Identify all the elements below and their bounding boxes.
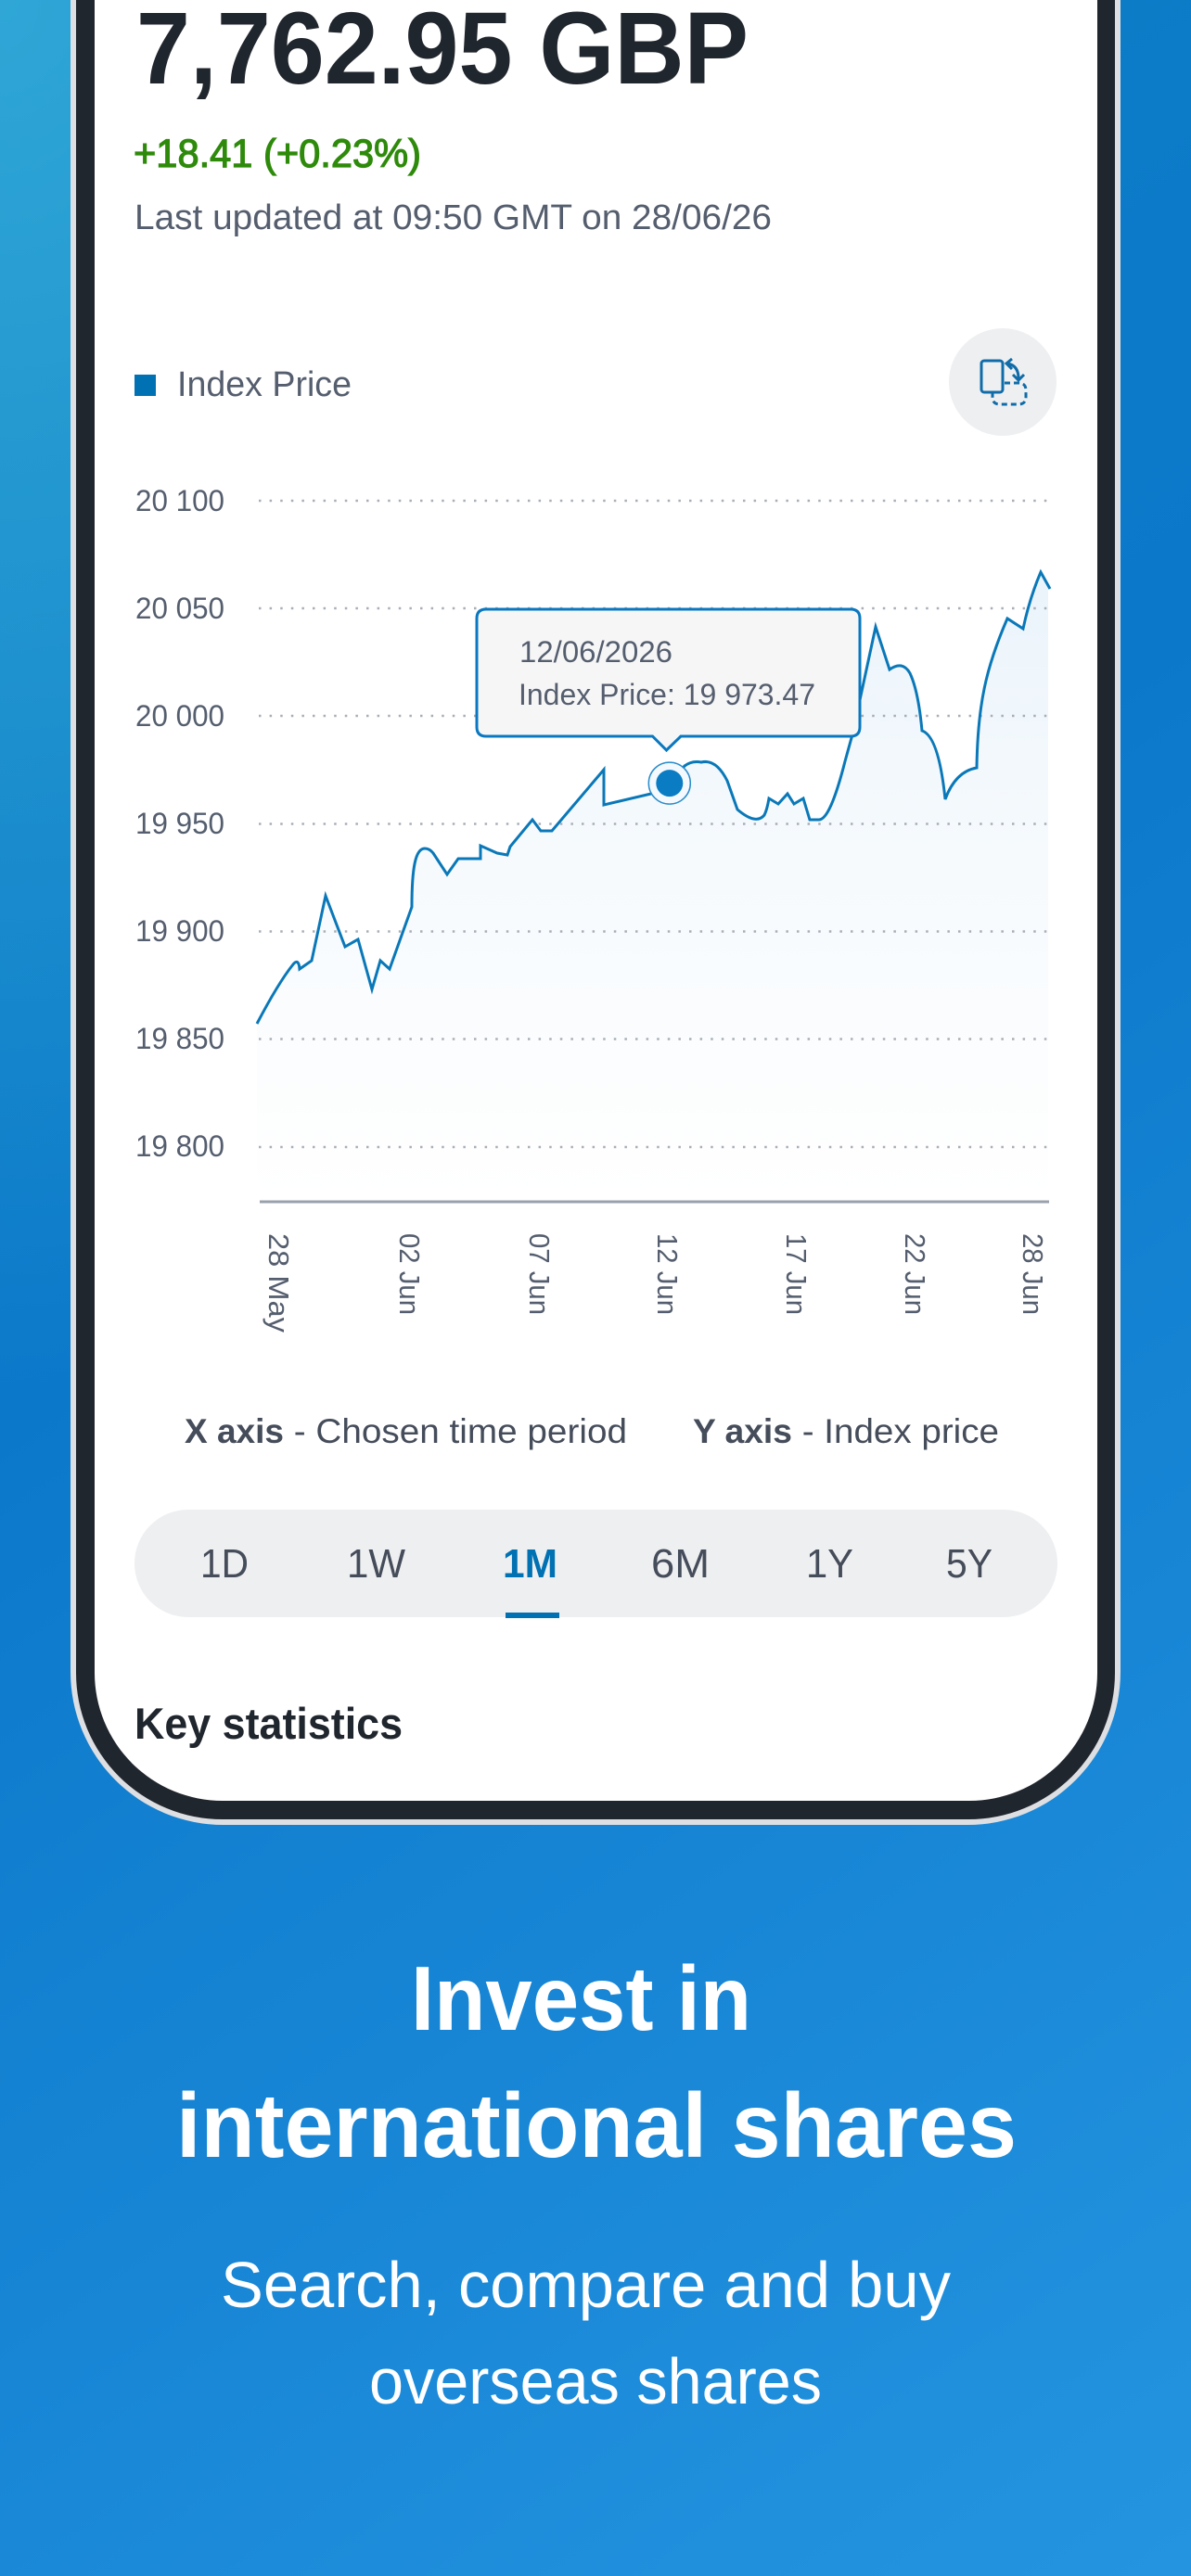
x axis labels: 07 Jun bbox=[523, 1233, 556, 1315]
time range selector: 1W bbox=[347, 1541, 405, 1587]
price change: +18.41 (+0.23%) bbox=[134, 132, 421, 176]
gridlines bbox=[259, 501, 1048, 1147]
y axis labels: 19 850 bbox=[135, 1022, 224, 1055]
y axis labels: 19 950 bbox=[135, 807, 224, 840]
time range selector: 5Y bbox=[946, 1541, 992, 1587]
tooltip bbox=[477, 609, 860, 750]
legend bbox=[134, 365, 352, 404]
x axis labels bbox=[263, 1233, 1049, 1333]
time range selector: 1D bbox=[200, 1541, 249, 1587]
y axis labels: 19 800 bbox=[135, 1129, 224, 1163]
tooltip date: 12/06/2026 bbox=[519, 635, 672, 669]
time range selector bbox=[134, 1510, 1057, 1618]
x axis labels: 02 Jun bbox=[393, 1233, 426, 1315]
x axis labels: 22 Jun bbox=[899, 1233, 931, 1315]
y axis labels: 19 900 bbox=[135, 914, 224, 948]
x axis labels: 17 Jun bbox=[780, 1233, 813, 1315]
x axis caption: - Chosen time period bbox=[284, 1412, 627, 1450]
selected point marker bbox=[648, 762, 690, 804]
subheading: overseas shares bbox=[369, 2345, 822, 2417]
active tab: 1M bbox=[503, 1541, 557, 1587]
y axis labels: 20 050 bbox=[135, 592, 224, 625]
icon: rotate chart button bbox=[949, 328, 1057, 436]
price line bbox=[257, 572, 1050, 1024]
key statistics heading: Key statistics bbox=[134, 1699, 403, 1748]
headline bbox=[176, 1947, 1017, 2176]
active tab underline bbox=[506, 1613, 559, 1618]
subheading bbox=[221, 2249, 951, 2417]
y axis labels: 20 000 bbox=[135, 699, 224, 733]
headline: international shares bbox=[176, 2074, 1017, 2176]
phone screen bbox=[95, 0, 1097, 1801]
time range selector: 6M bbox=[651, 1541, 710, 1587]
tooltip price: Index Price: 19 973.47 bbox=[519, 678, 815, 711]
phone outer edge bbox=[70, 0, 1121, 1825]
legend swatch bbox=[134, 375, 156, 396]
x axis labels: 28 Jun bbox=[1017, 1233, 1049, 1315]
time range selector: 1Y bbox=[806, 1541, 853, 1587]
line chart bbox=[135, 484, 1050, 1333]
x axis labels: 28 May bbox=[263, 1233, 295, 1333]
phone mockup bbox=[70, 0, 1121, 1825]
phone bezel bbox=[76, 0, 1115, 1819]
area under price line bbox=[257, 572, 1048, 1202]
subheading: Search, compare and buy bbox=[221, 2249, 951, 2321]
x axis labels: 12 Jun bbox=[651, 1233, 684, 1315]
y axis labels bbox=[135, 484, 224, 1163]
legend label: Index Price bbox=[177, 365, 352, 404]
y axis caption: Y axis bbox=[693, 1412, 792, 1450]
y axis caption: - Index price bbox=[792, 1412, 999, 1450]
last updated: Last updated at 09:50 GMT on 28/06/26 bbox=[134, 198, 772, 237]
y axis labels: 20 100 bbox=[135, 484, 224, 517]
headline: Invest in bbox=[411, 1947, 751, 2049]
x axis line bbox=[260, 1200, 1049, 1204]
x axis caption: X axis bbox=[185, 1412, 284, 1450]
